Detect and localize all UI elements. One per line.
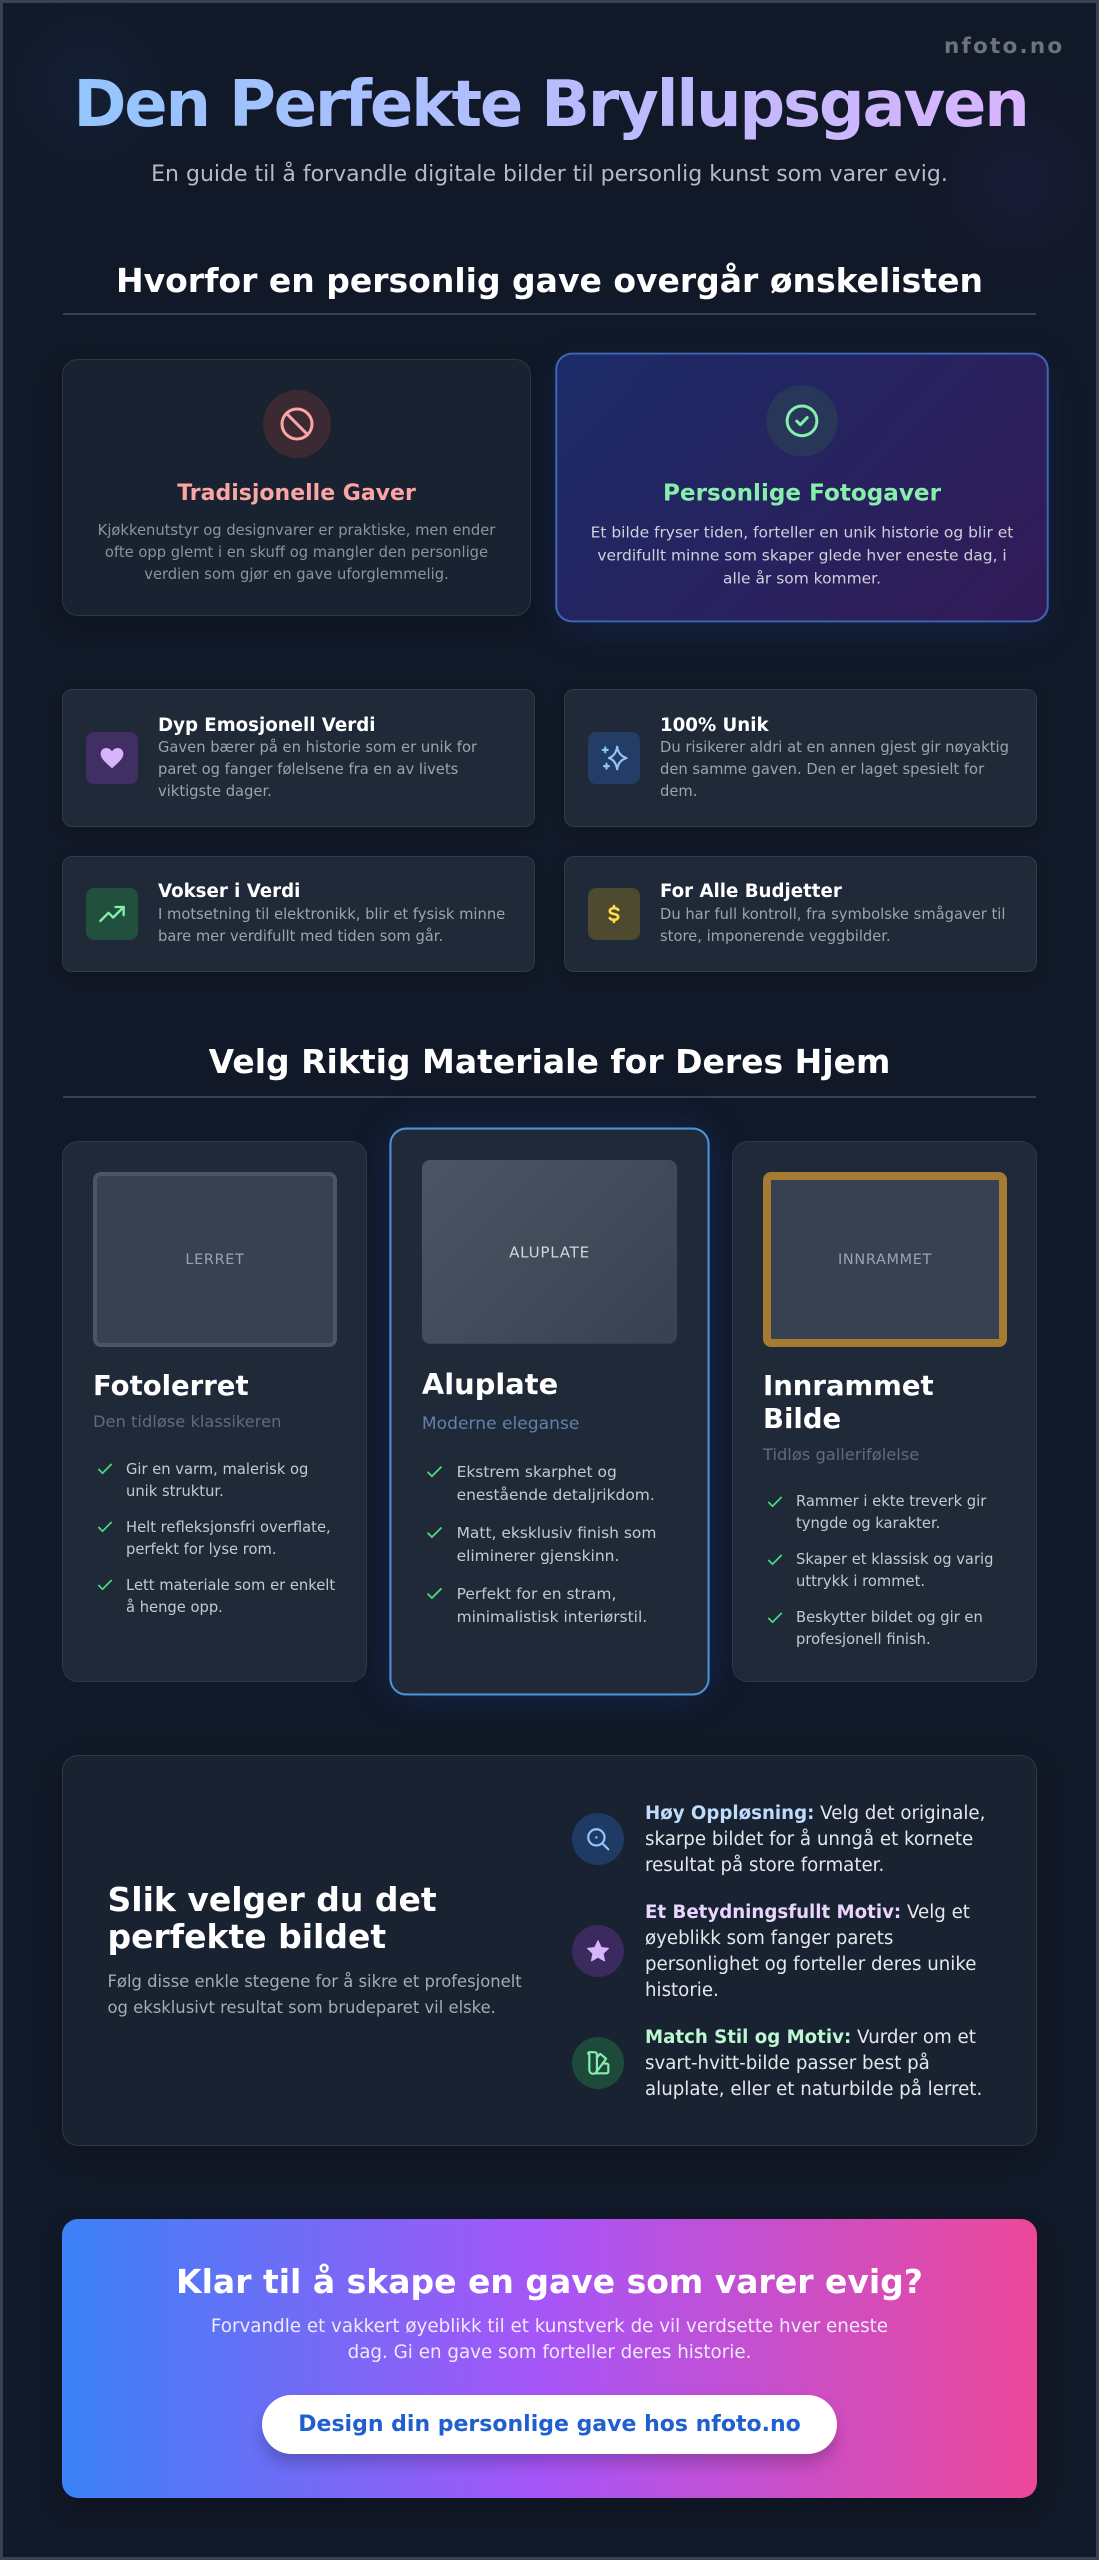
benefit: perfekt for lyse rom. [126,1541,277,1558]
benefit [768,1551,993,1590]
panel: traditional gifts [62,359,531,616]
benefit: profesjonell finish. [796,1631,931,1648]
benefit: unik struktur. [126,1483,224,1500]
step: match style: svart-hvitt-bilde passer best på [645,2053,930,2074]
step: high resolution: Høy Oppløsning: Velg det originale, [645,1803,985,1824]
benefit: tyngde og karakter. [796,1515,940,1532]
icon: dollar [588,888,640,940]
feature text: I motsetning til elektronikk, blir et fysisk minne [158,906,505,923]
feature text: viktigste dager. [158,783,272,800]
heading: choose material: Velg Riktig Materiale for Deres Hjem [209,1042,890,1081]
icon: sparkles [588,732,640,784]
feature heading: Vokser i Verdi [158,881,300,902]
feature text: bare mer verdifullt med tiden som går. [158,928,443,945]
intro text: Følg disse enkle stegene for å sikre et profesjonelt [108,1972,522,1991]
benefit [427,1585,647,1626]
feature heading: Dyp Emosjonell Verdi [158,715,375,736]
benefit: Lett materiale som er enkelt [126,1576,335,1594]
feature text: Du risikerer aldri at en annen gjest gir nøyaktig [660,739,1009,756]
product tagline: Tidløs gallerifølelse [763,1445,919,1464]
text: traditional gifts: verdien som gjør en gave uforglemmelig. [144,566,449,583]
feature text [158,906,505,945]
benefit: å henge opp. [126,1599,223,1616]
feature card: all budgets [564,856,1037,972]
product card: framed [732,1141,1037,1682]
icon: star [572,1925,624,1977]
step: meaningful motif: øyeblikk som fanger parets [645,1928,893,1949]
feature card: grows in value [62,856,535,972]
heading: traditional gifts: Tradisjonelle Gaver [177,481,416,506]
benefit [427,1463,655,1504]
icon: heart [86,732,138,784]
benefit: Gir en varm, malerisk og [126,1460,308,1478]
step: match style: aluplate, eller et naturbilde på lerret. [645,2079,982,2100]
icon: ban [262,390,330,458]
feature heading: 100% Unik [660,715,769,736]
benefit: eliminerer gjenskinn. [457,1547,619,1565]
feature text [158,738,478,800]
product name: Fotolerret [93,1370,249,1402]
feature text: paret og fanger følelsene fra en av livets [158,761,458,778]
step: meaningful motif: personlighet og forteller deres unike [645,1954,976,1975]
benefit: Beskytter bildet og gir en [796,1609,983,1626]
text: traditional gifts: ofte opp glemt i en skuff og mangler den personlige [105,544,488,561]
heading: personal gifts: Personlige Fotogaver [663,481,941,507]
text: call to action: dag. Gi en gave som forteller deres historie. [348,2342,751,2363]
heading: how to choose: Slik velger du det [108,1880,437,1918]
step: match style: Match Stil og Motiv: Vurder om et [645,2027,976,2048]
benefit: Rammer i ekte treverk gir [796,1493,986,1510]
product tagline: Moderne eleganse [422,1413,579,1433]
panel: how to choose picture [62,1755,1037,2146]
benefit: Helt refleksjonsfri overflate, [126,1518,331,1536]
image placeholder: aluminium: ALUPLATE [509,1245,590,1261]
icon: check circle [766,385,838,457]
benefit: Ekstrem skarphet og [457,1463,617,1481]
feature card: unique [564,689,1037,827]
intro text: og eksklusivt resultat som brudeparet vil elske. [108,1998,496,2017]
icon: trending up [86,888,138,940]
text: personal gifts: verdifullt minne som skaper glede hver eneste dag, i [597,547,1007,565]
step: match style [645,2027,982,2100]
heading: how to choose [108,1880,437,1956]
text: call to action [211,2316,888,2363]
button [262,2395,837,2454]
benefit: Matt, eksklusiv finish som [457,1524,656,1542]
feature text [660,906,1005,945]
image placeholder: framed: INNRAMMET [838,1252,932,1268]
feature card: emotional value [62,689,535,827]
benefit: uttrykk i rommet. [796,1573,925,1590]
product card: aluminium plate [389,1127,710,1696]
product name: Innrammet [763,1370,934,1402]
heading: why personal gift: Hvorfor en personlig gave overgår ønskelisten [116,260,983,300]
feature text: den samme gaven. Den er laget spesielt for [660,761,984,778]
feature text: Du har full kontroll, fra symbolske smågaver til [660,906,1005,923]
feature heading: For Alle Budjetter [660,881,842,902]
step: meaningful motif: historie. [645,1980,719,2001]
image placeholder: aluminium [422,1160,677,1344]
step: high resolution [645,1803,985,1876]
intro text [108,1972,522,2017]
benefit [98,1460,308,1500]
image placeholder: canvas [93,1172,337,1347]
text: personal gifts [591,524,1013,588]
step: high resolution: skarpe bildet for å unngå et kornete [645,1829,973,1850]
product name: Aluplate [422,1367,558,1401]
text: traditional gifts [98,522,496,583]
step: meaningful motif [645,1902,976,2001]
benefit [427,1524,656,1565]
subtitle: En guide til å forvandle digitale bilder til personlig kunst som varer evig. [151,162,948,187]
feature text: Gaven bærer på en historie som er unik for [158,739,477,756]
product card: canvas [62,1141,367,1682]
heading: how to choose: perfekte bildet [108,1916,386,1956]
benefit: enestående detaljrikdom. [457,1486,655,1504]
image placeholder: framed [763,1172,1007,1347]
benefit: Perfekt for en stram, [457,1585,616,1603]
text: personal gifts: alle år som kommer. [723,570,881,588]
benefit: minimalistisk interiørstil. [457,1608,647,1626]
text: call to action: Forvandle et vakkert øyeblikk til et kunstverk de vil verdsette hver eneste [211,2316,888,2337]
text: traditional gifts: Kjøkkenutstyr og designvarer er praktiske, men ender [98,522,495,539]
text: personal gifts: Et bilde fryser tiden, forteller en unik historie og blir et [591,524,1013,542]
step: meaningful motif: Et Betydningsfullt Motiv: Velg et [645,1902,970,1923]
benefit [98,1576,335,1616]
brand mark: nfoto.no [944,34,1064,59]
benefit [98,1518,331,1558]
title: Den Perfekte Bryllupsgaven [73,68,1028,142]
icon: swatch [572,2037,624,2089]
product name [763,1370,934,1435]
panel: personal photo gifts [555,353,1049,622]
feature text: dem. [660,783,697,800]
product name: Bilde [763,1403,841,1435]
product tagline: Den tidløse klassikeren [93,1412,281,1431]
benefit [768,1609,983,1648]
panel: call to action [62,2219,1037,2498]
benefit [768,1493,986,1532]
heading: call to action: Klar til å skape en gave som varer evig? [176,2262,923,2300]
image placeholder: canvas: LERRET [185,1252,245,1268]
feature text [660,739,1009,800]
feature text: store, imponerende veggbilder. [660,928,891,945]
step: high resolution: resultat på store formater. [645,1855,884,1876]
button: Design din personlige gave hos nfoto.no [298,2412,801,2437]
benefit: Skaper et klassisk og varig [796,1551,993,1568]
icon: search [572,1813,624,1865]
